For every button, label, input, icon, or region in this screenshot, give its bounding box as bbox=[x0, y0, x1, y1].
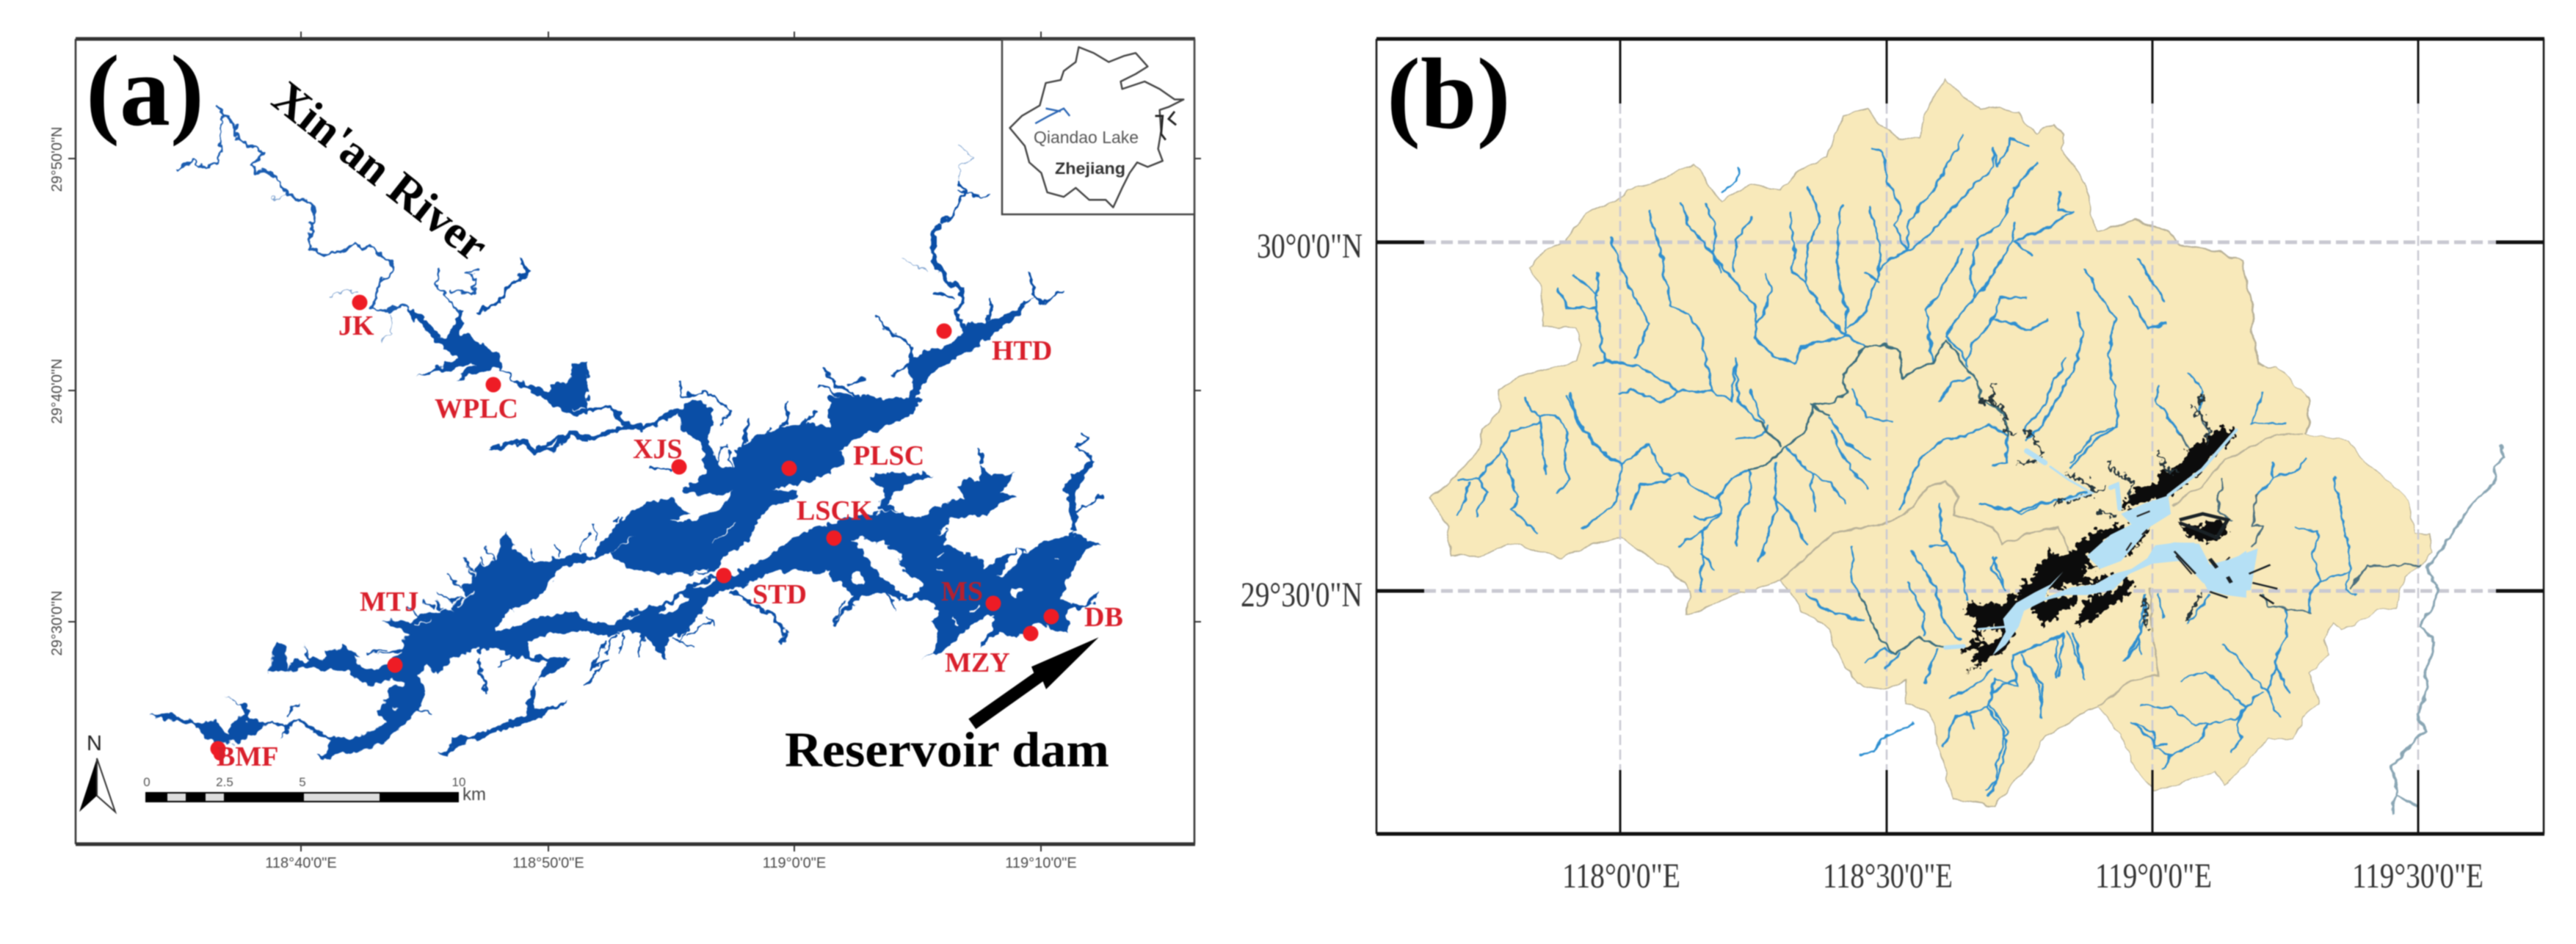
latitude labels a: 29°40'0"N bbox=[49, 359, 65, 424]
central lake bbox=[477, 382, 859, 739]
site labels: STD bbox=[752, 579, 807, 610]
longitude labels a: 118°50'0"E bbox=[512, 855, 584, 871]
site labels: PLSC bbox=[853, 440, 924, 471]
lake open water bbox=[1945, 430, 2246, 656]
latitude labels b: 30°0'0"N bbox=[1257, 227, 1363, 266]
outflow river bbox=[2391, 445, 2506, 815]
latitude labels a: 29°50'0"N bbox=[49, 127, 65, 192]
lake east section bbox=[2157, 514, 2277, 603]
rivers: dark eastern channels bbox=[2181, 412, 2420, 613]
river network bbox=[1457, 137, 2506, 815]
upper river and west arm bbox=[176, 107, 587, 451]
longitude labels b: 119°0'0"E bbox=[2095, 857, 2212, 896]
inset label: province: Zhejiang bbox=[1055, 159, 1125, 178]
west lake and Bamenfan arm bbox=[149, 531, 514, 761]
graticule dashes bbox=[1424, 104, 2496, 770]
site labels: BMF bbox=[217, 741, 278, 772]
site labels: LSCK bbox=[797, 495, 873, 526]
site labels: MZY bbox=[945, 647, 1010, 678]
site labels: XJS bbox=[633, 434, 683, 465]
rivers: eastern basin bbox=[1982, 374, 2356, 790]
heading (a): (a) bbox=[86, 35, 204, 147]
longitude labels a: 118°40'0"E bbox=[265, 855, 337, 871]
subbasin boundaries bbox=[1780, 433, 2304, 707]
site labels: JK bbox=[338, 311, 374, 341]
longitude labels b: 119°30'0"E bbox=[2352, 857, 2484, 896]
site labels bbox=[217, 311, 1123, 772]
map frame b bbox=[1376, 39, 2544, 834]
rivers: dark main channels bbox=[1750, 340, 2007, 653]
reservoir lake in watershed bbox=[1945, 382, 2277, 672]
scale bar: 0 bbox=[143, 775, 150, 789]
HTD northern arm bbox=[734, 146, 1061, 514]
label: Xin'an River: Xin'an River bbox=[263, 71, 498, 272]
inset: Zhejiang locator bbox=[1002, 40, 1194, 214]
site labels: DB bbox=[1084, 602, 1123, 633]
latitude labels b: 29°30'0"N bbox=[1241, 576, 1363, 614]
longitude labels b: 118°30'0"E bbox=[1823, 857, 1953, 896]
longitude labels a: 119°0'0"E bbox=[763, 855, 826, 871]
latitude labels a: 29°30'0"N bbox=[49, 591, 65, 656]
site markers bbox=[210, 295, 1059, 760]
label: Reservoir dam: Reservoir dam bbox=[785, 722, 1109, 777]
site labels: MTJ bbox=[360, 587, 418, 617]
sampling sites bbox=[210, 295, 1123, 772]
longitude labels b bbox=[1562, 857, 2484, 896]
north arrow bbox=[79, 732, 115, 812]
east lake near dam bbox=[830, 396, 1103, 659]
rivers: western basin bbox=[1457, 137, 2166, 796]
panel a: Qiandao Lake sampling map bbox=[49, 32, 1201, 871]
longitude labels a: 119°10'0"E bbox=[1005, 855, 1077, 871]
lake shoreline, dark jagged bbox=[1961, 382, 2236, 672]
scale bar: 5 bbox=[299, 775, 306, 789]
site labels: WPLC bbox=[435, 393, 518, 424]
heading (b): (b) bbox=[1387, 37, 1511, 150]
site labels: HTD bbox=[992, 335, 1052, 366]
site labels: MS bbox=[941, 576, 983, 607]
watershed polygon bbox=[1432, 80, 2432, 806]
scale bar bbox=[143, 775, 486, 805]
scale bar: 10 bbox=[452, 775, 465, 789]
latitude labels b bbox=[1241, 227, 1363, 614]
inset label: lake: Qiandao Lake bbox=[1034, 128, 1139, 147]
north arrow: N bbox=[87, 732, 102, 755]
latitude labels a bbox=[49, 127, 65, 656]
panel b: watershed map bbox=[1241, 37, 2544, 896]
lake water body bbox=[149, 107, 1103, 761]
arrow: reservoir dam pointer bbox=[968, 637, 1099, 729]
map frame a bbox=[68, 32, 1201, 852]
longitude labels a bbox=[265, 855, 1077, 871]
longitude labels b: 118°0'0"E bbox=[1562, 857, 1680, 896]
Zhejiang outline bbox=[1010, 47, 1183, 207]
scale bar: km bbox=[462, 785, 486, 805]
scale bar: 2.5 bbox=[216, 775, 233, 789]
